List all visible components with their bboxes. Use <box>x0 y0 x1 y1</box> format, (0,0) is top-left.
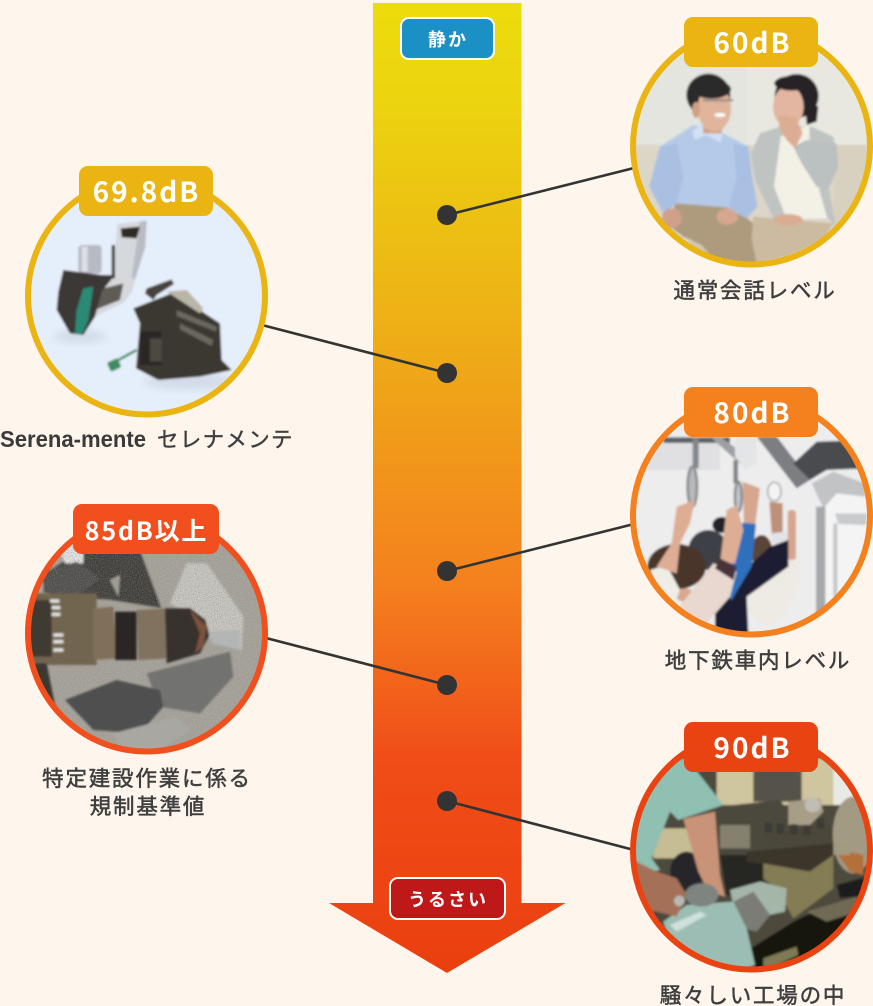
panel: 85dB construction <box>20 504 273 821</box>
caption <box>0 423 294 454</box>
level badge: 80dB: 80dB <box>713 392 792 432</box>
level badge: 90dB <box>684 722 818 772</box>
level badge: 90dB: 90dB <box>713 727 792 767</box>
panel: 69.8dB Serena-mente <box>0 160 294 454</box>
caption: 地下鉄車内レベル <box>665 644 851 675</box>
level badge: 85dB or more <box>73 504 219 554</box>
gradient arrow: quiet to loud <box>329 3 566 973</box>
panel: 80dB subway <box>620 387 873 675</box>
level badge: 69.8dB: 69.8dB <box>93 171 200 211</box>
ring <box>633 28 870 264</box>
ring <box>28 514 265 752</box>
photo: jackhammer on concrete <box>31 543 262 748</box>
caption: セレナメンテ <box>157 423 294 454</box>
caption: Serena-mente <box>0 426 146 452</box>
caption: 特定建設作業に係る <box>42 762 252 793</box>
level badge: 85dB or more: 85dB以上 <box>85 512 208 548</box>
connector lines and scale dots <box>262 168 634 850</box>
tag: quiet <box>401 18 494 59</box>
ring <box>633 398 870 634</box>
ring <box>28 178 265 414</box>
photo: passengers holding straps in a train <box>636 422 867 632</box>
photo: couple talking on a sofa <box>636 52 867 262</box>
level badge: 80dB <box>684 387 818 437</box>
level badge: 60dB: 60dB <box>713 22 792 62</box>
photo: worker at a lathe <box>636 756 867 966</box>
caption: 規制基準値 <box>90 790 206 821</box>
photo: Serena-mente machines <box>31 202 262 412</box>
level badge: 69.8dB <box>79 166 213 216</box>
ring <box>633 732 870 970</box>
tag: loud: うるさい <box>408 886 488 912</box>
caption: 通常会話レベル <box>673 274 837 305</box>
tag: loud <box>390 878 505 919</box>
panel: 60dB conversation <box>620 17 873 305</box>
level badge: 60dB <box>684 17 818 67</box>
caption <box>42 762 252 821</box>
tag: quiet: 静か <box>428 26 468 52</box>
panel: 90dB factory <box>620 722 873 1006</box>
